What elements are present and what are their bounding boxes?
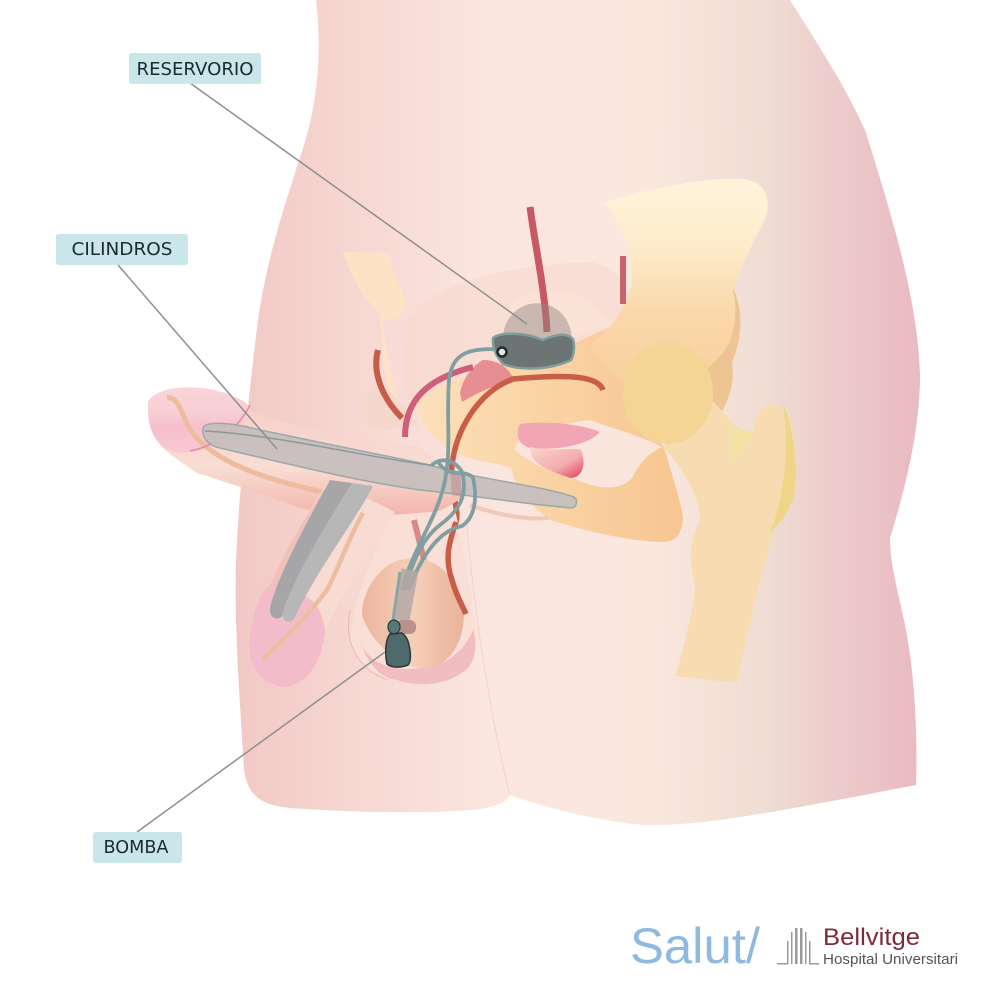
pubic ramus and ischium xyxy=(417,320,683,542)
logo: Bellvitge Hospital Universitari xyxy=(823,924,958,968)
callout line: bomba xyxy=(137,652,385,832)
callout: bomba: BOMBA xyxy=(104,838,169,858)
icon: pump xyxy=(386,620,416,667)
iliac rim shadow xyxy=(700,288,740,420)
logo: Salut: Salut/ xyxy=(630,918,760,974)
femoral head xyxy=(623,342,713,444)
callout line: reservorio xyxy=(190,83,527,324)
panel: penile shaft and urethra xyxy=(148,387,548,518)
panel: implant cylinders flaccid xyxy=(270,480,373,622)
obturator opening xyxy=(515,420,662,487)
femur xyxy=(663,400,796,683)
panel: bladder and rectum organs xyxy=(460,360,600,478)
callout: reservorio: RESERVORIO xyxy=(136,60,254,80)
callout: cilindros: CILINDROS xyxy=(72,240,172,260)
callout: bomba xyxy=(93,832,182,863)
panel: pelvis and hip bones xyxy=(343,179,796,683)
panel: flaccid penis position xyxy=(249,480,395,687)
logo: Bellvitge building mark xyxy=(777,928,819,964)
logo: Bellvitge Hospital Universitari: Hospital Universitari xyxy=(823,951,958,968)
callout: cilindros xyxy=(56,234,188,265)
panel: scrotum and testis xyxy=(348,510,476,684)
glans xyxy=(148,387,250,453)
coccyx xyxy=(343,252,407,415)
panel: body silhouette xyxy=(236,0,920,825)
logo: Bellvitge Hospital Universitari: Bellvitge xyxy=(823,924,920,951)
panel: vessels xyxy=(376,207,623,614)
panel: implant cylinder extended xyxy=(203,423,576,508)
sacrum soft shape xyxy=(403,262,629,413)
ilium xyxy=(590,179,768,395)
callout: reservorio xyxy=(129,53,261,84)
icon: reservoir xyxy=(493,303,574,369)
panel: connecting tubes xyxy=(393,349,496,620)
callout line: cilindros xyxy=(118,265,277,449)
